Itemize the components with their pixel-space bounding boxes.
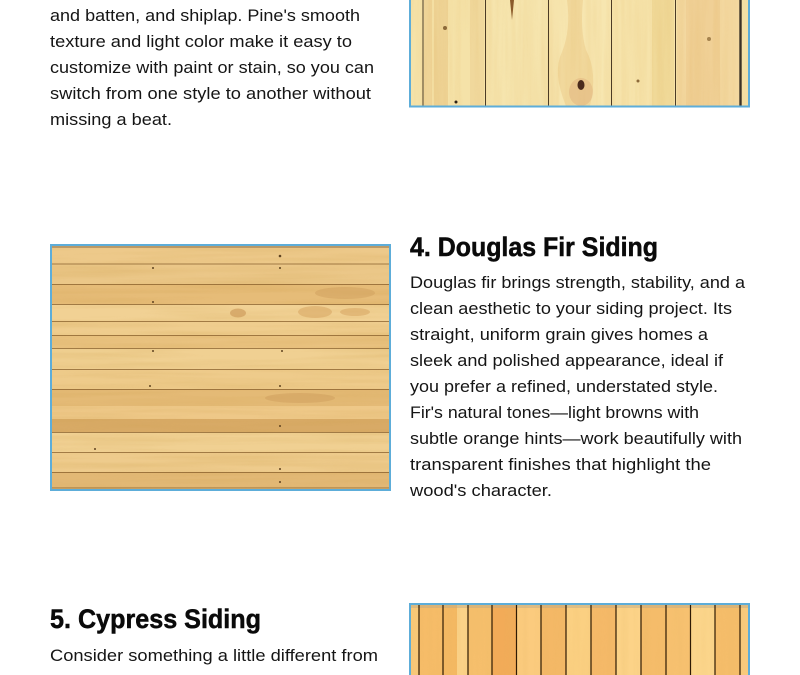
text block: pine siding description: [50, 6, 374, 129]
text block: Douglas fir description: straight, uniform grain gives homes a: [410, 325, 709, 344]
text block: pine siding description: texture and light color make it easy to: [50, 32, 352, 51]
text block: Douglas fir description: subtle orange hints—work beautifully with: [410, 429, 742, 448]
heading: Douglas Fir Siding: 4. Douglas Fir Siding: [410, 232, 658, 262]
text block: Douglas fir description: Douglas fir brings strength, stability, and a: [410, 273, 746, 292]
text block: pine siding description: and batten, and shiplap. Pine's smooth: [50, 6, 360, 25]
text block: Douglas fir description: clean aesthetic to your siding project. Its: [410, 299, 732, 318]
text block: Douglas fir description: [409, 273, 746, 500]
text block: Douglas fir description: you prefer a refined, understated style.: [410, 377, 718, 396]
text block: Douglas fir description: transparent finishes that highlight the: [410, 455, 711, 474]
text block: Cypress description: [50, 646, 378, 675]
text block: Douglas fir description: wood's character.: [409, 481, 552, 500]
text block: pine siding description: missing a beat.: [50, 110, 172, 129]
image: Douglas fir planks: [51, 245, 390, 490]
text block: Douglas fir description: Fir's natural tones—light browns with: [410, 403, 699, 422]
heading: Cypress Siding: 5. Cypress Siding: [50, 604, 261, 634]
text block: Cypress description: Consider something a little different from: [50, 646, 378, 665]
text block: pine siding description: customize with paint or stain, so you can: [50, 58, 374, 77]
text block: pine siding description: switch from one style to another without: [50, 84, 371, 103]
text block: Douglas fir description: sleek and polished appearance, ideal if: [410, 351, 723, 370]
image: pine planks: [410, 0, 749, 106]
image: cypress planks: [410, 604, 749, 675]
